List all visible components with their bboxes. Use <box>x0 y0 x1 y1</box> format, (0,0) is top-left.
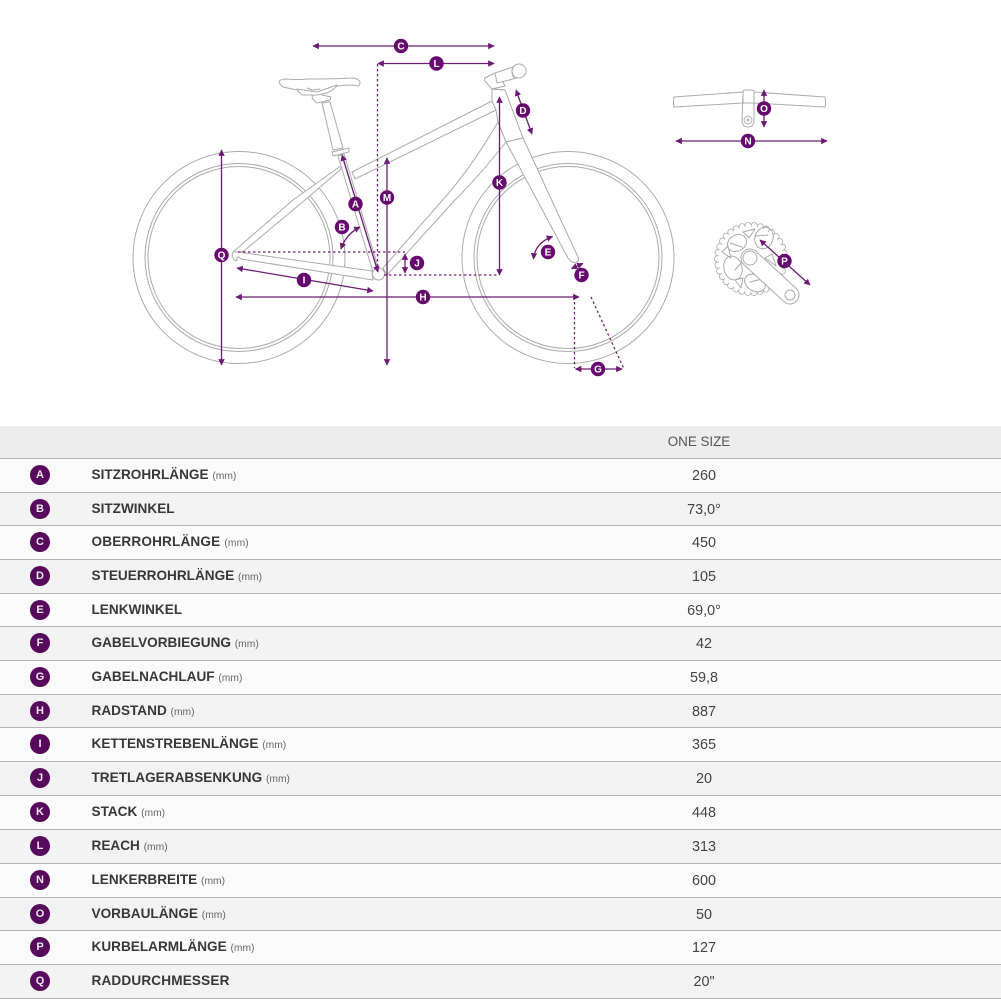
row K <box>0 795 1001 829</box>
row G: G <box>36 671 44 683</box>
dimension F <box>572 264 589 282</box>
row J: TRETLAGERABSENKUNG (mm) <box>92 770 290 785</box>
dimension F: F <box>578 270 585 282</box>
row A: A <box>36 469 44 481</box>
row N: 600 <box>692 873 716 889</box>
row F <box>0 626 1001 660</box>
row D: D <box>36 570 44 582</box>
saddle <box>279 78 360 103</box>
row P: KURBELARMLÄNGE (mm) <box>92 939 254 954</box>
dimension C: C <box>397 42 405 52</box>
row H: H <box>36 705 44 717</box>
row K: STACK (mm) <box>92 804 165 819</box>
row D <box>0 559 1001 593</box>
row O: 50 <box>696 907 712 923</box>
row G <box>0 660 1001 694</box>
row H <box>0 694 1001 727</box>
row G: 59,8 <box>690 670 718 686</box>
dimension P: P <box>781 256 788 268</box>
row E: 69,0° <box>687 603 721 619</box>
dimension M: M <box>383 193 391 204</box>
row O <box>0 897 1001 930</box>
dimension J <box>405 254 424 273</box>
row A <box>0 458 1001 492</box>
dimension P <box>760 240 810 285</box>
row C: 450 <box>692 535 716 551</box>
row K: 448 <box>692 805 716 821</box>
row P: P <box>36 941 44 953</box>
row E <box>0 593 1001 626</box>
dimension O <box>757 90 771 127</box>
row L: L <box>37 840 43 852</box>
row J: 20 <box>696 771 712 787</box>
row L <box>0 829 1001 863</box>
dimension L <box>378 56 494 71</box>
dimension B <box>335 220 360 249</box>
table header <box>0 426 1001 458</box>
row O: O <box>36 908 44 920</box>
dimension Q: Q <box>218 250 226 262</box>
row E: LENKWINKEL <box>92 602 182 617</box>
fork <box>506 138 578 262</box>
handlebar top view <box>674 90 826 127</box>
crankset <box>718 225 795 300</box>
dimension M <box>380 158 394 365</box>
row C: C <box>36 536 44 548</box>
row C <box>0 525 1001 559</box>
bottom bracket <box>372 268 384 280</box>
row A: SITZROHRLÄNGE (mm) <box>92 467 236 482</box>
row H: 887 <box>692 704 716 720</box>
row B: B <box>36 503 44 515</box>
row J: J <box>37 772 43 784</box>
bike geometry diagram <box>132 38 828 376</box>
row N: N <box>36 874 44 886</box>
dimension N: N <box>744 136 752 148</box>
row Q: RADDURCHMESSER <box>92 973 230 988</box>
dimension D: D <box>519 106 527 117</box>
row I <box>0 727 1001 761</box>
dimension K <box>492 97 507 275</box>
row B: SITZWINKEL <box>92 501 175 516</box>
table header: ONE SIZE <box>668 434 730 449</box>
row Q: 20" <box>693 974 715 990</box>
row D: STEUERROHRLÄNGE (mm) <box>92 568 262 583</box>
dimension B: B <box>338 222 346 234</box>
row C: OBERROHRLÄNGE (mm) <box>92 534 249 549</box>
dimension G <box>576 362 622 376</box>
row B: 73,0° <box>687 502 721 518</box>
row A: 260 <box>692 468 716 484</box>
bicycle frame <box>232 64 578 280</box>
row N <box>0 863 1001 897</box>
dimension E: E <box>545 248 552 258</box>
row H: RADSTAND (mm) <box>92 703 195 718</box>
dimension O: O <box>760 104 768 115</box>
row P <box>0 930 1001 964</box>
row Q <box>0 964 1001 998</box>
row I: 365 <box>692 737 716 753</box>
dimension H: H <box>419 292 427 304</box>
dimension A: A <box>352 200 359 210</box>
row J <box>0 761 1001 795</box>
dotted guide lines <box>238 64 624 369</box>
stem and grip <box>484 67 517 90</box>
row L: 313 <box>692 839 716 855</box>
row K: K <box>36 806 44 818</box>
dimension K: K <box>496 178 504 189</box>
row D: 105 <box>692 569 716 585</box>
dimension I: I <box>303 276 306 286</box>
row F: GABELVORBIEGUNG (mm) <box>92 635 259 650</box>
row F: F <box>37 637 43 649</box>
row B <box>0 492 1001 525</box>
dimension H <box>236 290 579 304</box>
dimension D <box>516 90 532 134</box>
dimension N <box>676 134 827 148</box>
dimension Q <box>214 150 229 365</box>
row N: LENKERBREITE (mm) <box>92 872 225 887</box>
row Q: Q <box>36 975 44 987</box>
row O: VORBAULÄNGE (mm) <box>92 906 226 921</box>
rear wheel <box>133 152 345 364</box>
dimension A <box>342 155 378 272</box>
row I: KETTENSTREBENLÄNGE (mm) <box>92 736 286 751</box>
row L: REACH (mm) <box>92 838 168 853</box>
row P: 127 <box>692 940 716 956</box>
seat clamp <box>332 148 349 156</box>
dimension G: G <box>594 364 602 376</box>
row G: GABELNACHLAUF (mm) <box>92 669 242 684</box>
row I: I <box>38 738 42 750</box>
dimension L: L <box>433 59 440 70</box>
front wheel <box>462 152 674 364</box>
dimension C <box>313 39 494 53</box>
dimension J: J <box>414 258 420 270</box>
dimension I <box>237 268 373 291</box>
row E: E <box>36 604 44 616</box>
row F: 42 <box>696 636 712 652</box>
dimension E <box>534 236 555 259</box>
